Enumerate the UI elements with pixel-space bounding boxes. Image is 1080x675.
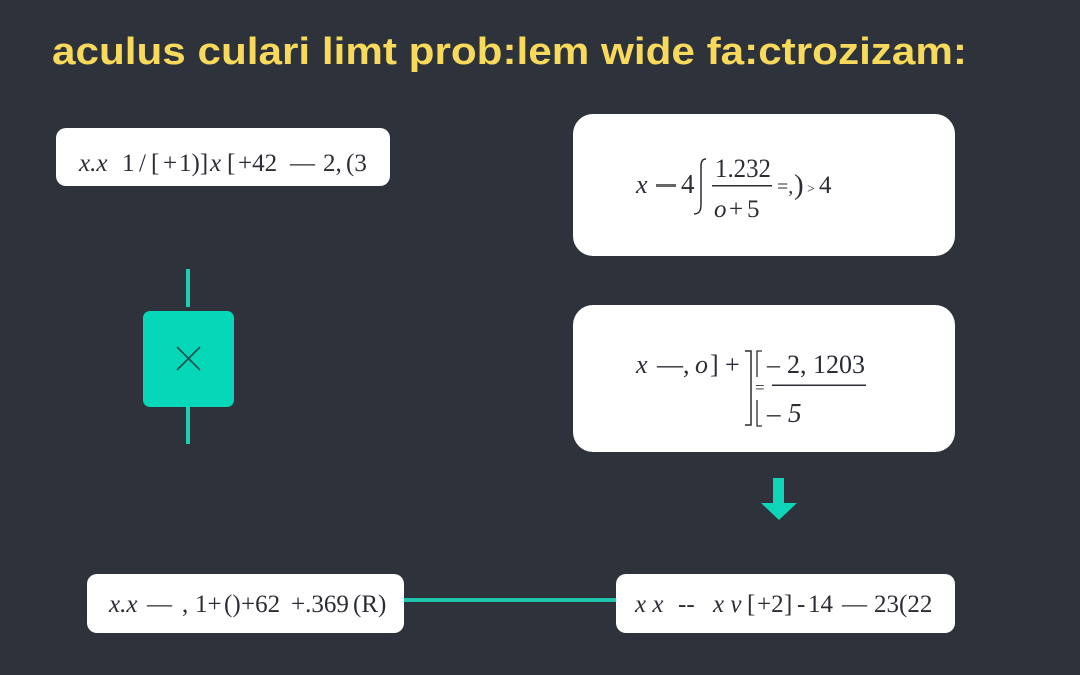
panel: bracket equation: —, [656, 350, 690, 379]
panel: top-left equation [56, 128, 390, 186]
panel: bottom-left equation: , [182, 591, 188, 618]
panel: bottom-left equation: — [146, 591, 173, 618]
panel: integral equation: o [714, 196, 726, 223]
panel: bottom-left equation [87, 574, 404, 633]
panel: bottom-right equation: - [797, 591, 805, 618]
panel: integral equation: 5 [747, 196, 760, 223]
panel: bottom-right equation: x v [712, 591, 742, 618]
panel: bracket equation: + [725, 350, 740, 379]
panel: bottom-right equation: ] [784, 591, 792, 618]
panel: integral equation [573, 114, 955, 256]
panel: top-left equation: x.x [78, 150, 107, 177]
panel: top-left equation: [ [227, 150, 235, 177]
icon: multiply node [143, 269, 234, 444]
panel: bracket equation: – [766, 398, 781, 428]
panel: top-left equation: / [139, 150, 146, 177]
panel: integral equation: > [807, 182, 815, 197]
panel: bottom-right equation: [ [747, 591, 755, 618]
panel: bottom-left equation: x.x [108, 591, 137, 618]
panel: integral equation: 4 [681, 169, 695, 199]
panel: integral equation: ) [794, 169, 804, 201]
panel: bottom-right equation: 14 [808, 591, 834, 618]
panel: integral equation: 1.232 [715, 154, 771, 183]
panel: top-left equation: –– [289, 150, 316, 177]
panel: bracket equation: – [766, 350, 781, 379]
panel: bracket equation: 1203 [813, 350, 865, 379]
panel: bracket equation: = [755, 378, 765, 397]
panel: top-left equation: 1 [122, 150, 134, 177]
title: aculus culari limt prob:lem wide fa:ctrozizam: [52, 31, 967, 73]
panel: bottom-left equation: +.369 [291, 591, 349, 618]
panel: bottom-right equation: — [841, 591, 868, 618]
panel: top-left equation: +42 [238, 150, 277, 177]
panel: bottom-left equation: () [224, 591, 241, 618]
panel: integral equation: x [635, 170, 648, 199]
panel: top-left equation: x [209, 150, 221, 177]
panel: bottom-left equation: (R) [353, 591, 386, 618]
panel: bracket equation: x [635, 350, 648, 379]
panel: integral equation: =, [777, 176, 793, 198]
panel: bottom-right equation: 23(22 [874, 591, 932, 618]
connector line [404, 598, 616, 602]
panel: top-left equation: + [163, 150, 177, 177]
panel: bottom-right equation: +2 [757, 591, 784, 618]
arrow: down [761, 478, 797, 520]
panel: top-left equation: [ [151, 150, 159, 177]
panel: bracket equation [573, 305, 955, 452]
panel: top-left equation: 2, [323, 150, 342, 177]
panel: bracket equation: 2, [787, 350, 806, 379]
panel: bottom-right equation: x x [634, 591, 663, 618]
panel: bracket equation: o [695, 350, 708, 379]
panel: bracket equation: 5 [788, 398, 802, 428]
panel: bottom-left equation: 1+ [195, 591, 222, 618]
panel: bottom-right equation: -- [678, 591, 695, 618]
panel: bracket equation: ] [710, 350, 719, 379]
panel: top-left equation: 1)] [179, 150, 208, 177]
panel: top-left equation: (3 [346, 150, 367, 177]
panel: bottom-right equation [616, 574, 955, 633]
panel: integral equation: 4 [819, 172, 832, 199]
panel: integral equation: + [729, 196, 743, 223]
panel: bottom-left equation: +62 [241, 591, 280, 618]
